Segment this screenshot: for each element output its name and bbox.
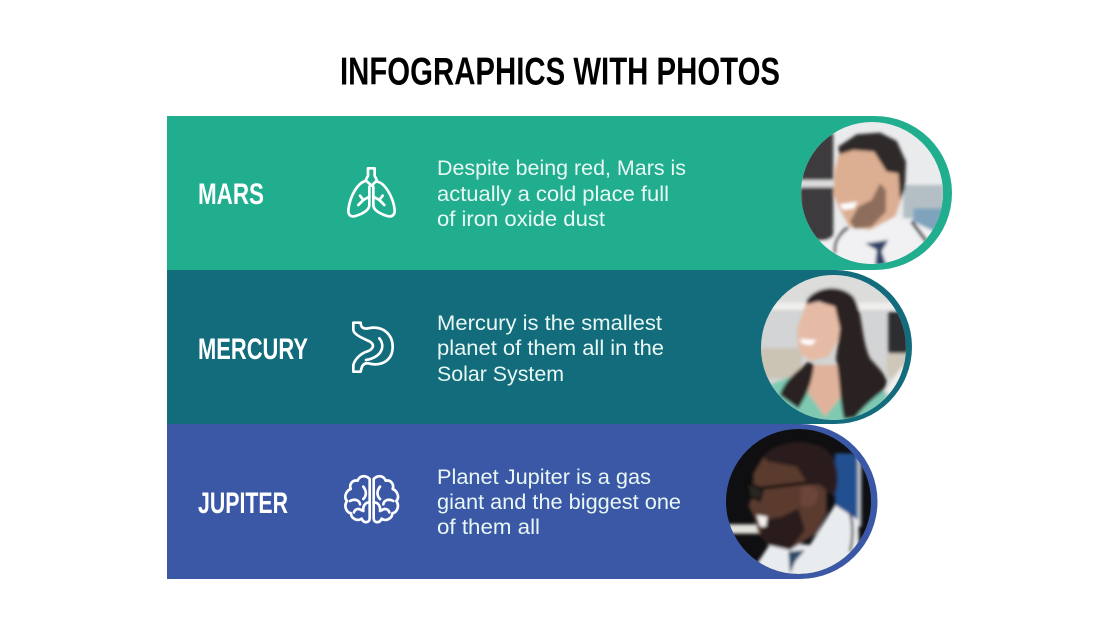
text: Mars description [437,157,686,231]
text: Mars description: of iron oxide dust [437,208,605,231]
band: Jupiter [167,424,878,579]
text: Mercury description: Mercury is the smallest [437,312,662,335]
icon: lungs [348,168,395,216]
band: Mars [167,116,952,270]
text: Mercury description: planet of them all in the [437,337,664,360]
text: Mars description: Despite being red, Mars is [437,157,686,180]
label: Jupiter: JUPITER [198,487,288,520]
panel: Jupiter [167,424,878,580]
label: Mercury: MERCURY [198,333,308,366]
label: Mars: MARS [198,178,264,211]
panel: Mercury [167,270,912,425]
text: Jupiter description: Planet Jupiter is a gas [437,466,651,489]
icon: brain [345,476,398,522]
panel: Mars [167,115,952,272]
text: Mars description: actually a cold place full [437,183,669,206]
title: INFOGRAPHICS WITH PHOTOS [340,50,780,94]
photo: smiling man with glasses [726,429,871,574]
text: Mercury description: Solar System [437,363,564,386]
text: Mercury description [437,312,664,386]
text: Jupiter description [437,466,681,539]
icon: stomach [353,323,393,372]
text: Jupiter description: of them all [437,516,540,539]
photo: smiling male doctor [801,122,943,264]
text: Jupiter description: giant and the biggest one [437,491,681,514]
band: Mercury [167,270,912,424]
photo: smiling woman [761,275,906,420]
